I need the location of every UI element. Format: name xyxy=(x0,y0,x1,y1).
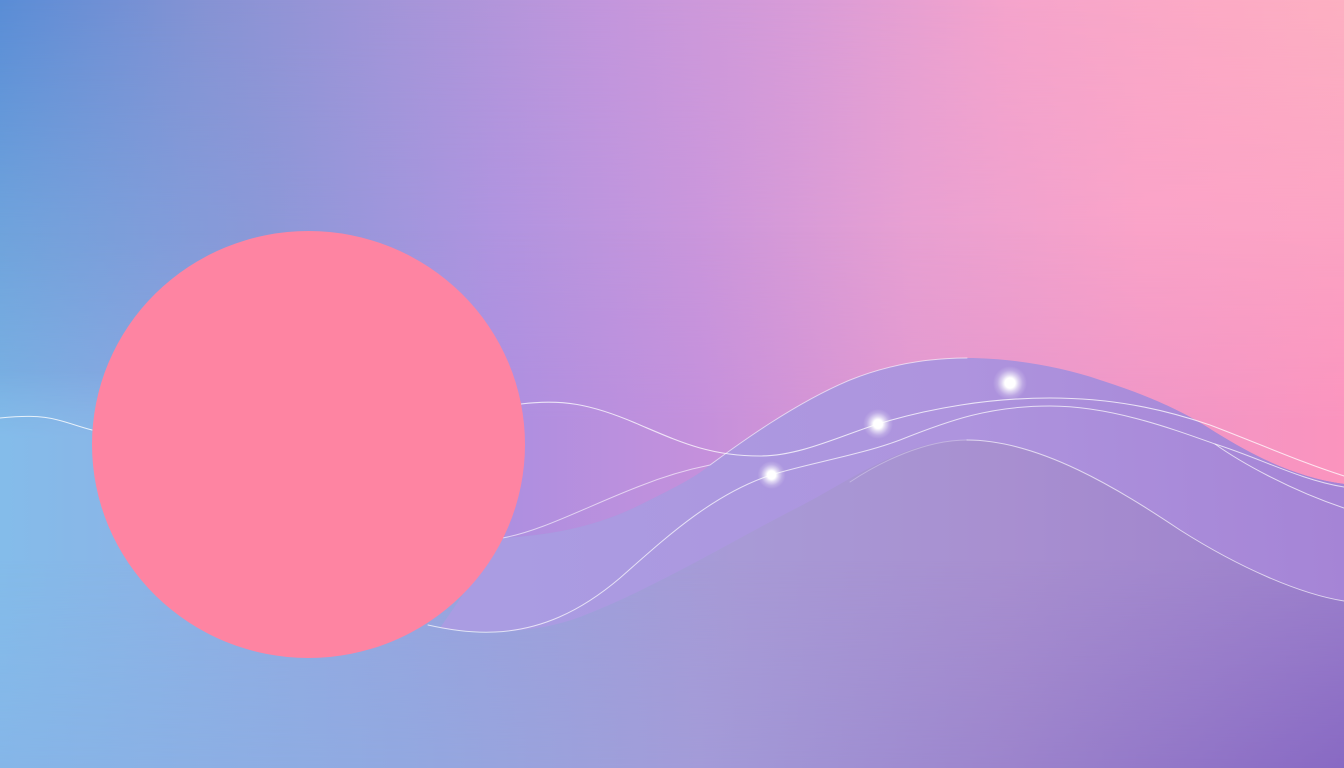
line: upper wave xyxy=(521,398,1344,476)
line: middle wave branch xyxy=(1215,444,1344,508)
line: lower wave faint start xyxy=(850,440,967,482)
dot: lower xyxy=(758,461,786,489)
large coral circle xyxy=(92,231,525,658)
translucent wave band xyxy=(440,358,1344,632)
wave lines xyxy=(0,358,1344,632)
line: lower wave xyxy=(967,440,1344,601)
dot: upper right xyxy=(993,366,1027,400)
glowing dots xyxy=(758,366,1027,489)
line: band top edge xyxy=(502,358,967,538)
line: middle wave xyxy=(428,406,1344,632)
dot: middle xyxy=(863,409,893,439)
line: far left segment xyxy=(0,416,92,430)
